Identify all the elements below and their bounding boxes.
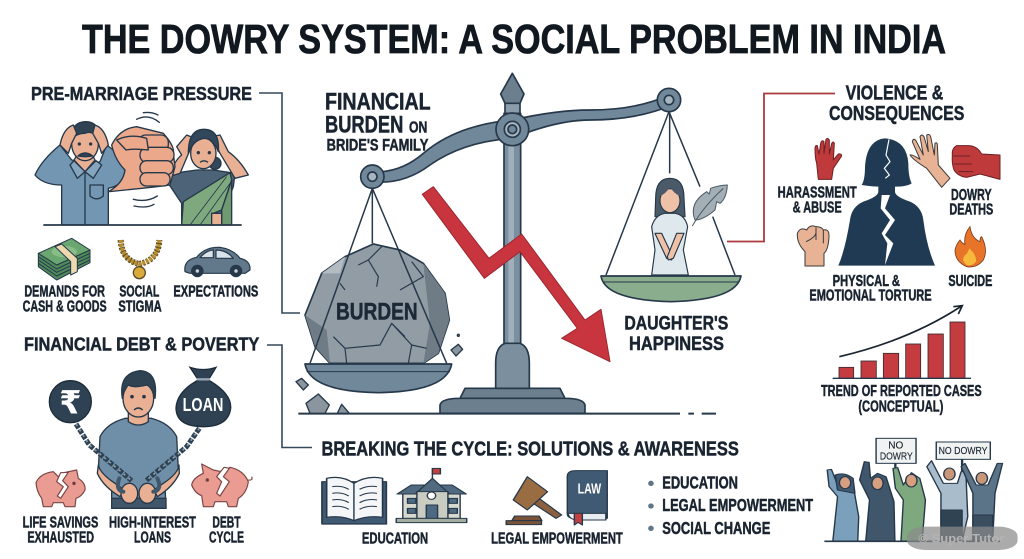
label: physical and emotional torture: EMOTIONAL TORTURE [809,288,932,305]
panel: pre-marriage pressure [23,83,258,316]
icon: broken piggy bank right [192,464,252,507]
bar chart: trend of reported cases [833,306,971,378]
icon: left pan and strings [305,188,452,393]
label: life savings exhausted: EXHAUSTED [27,529,94,546]
icon: daughter [652,178,688,275]
icon: gavel [506,477,562,525]
icon: scale beam [361,88,681,188]
heading: breaking the cycle: BREAKING THE CYCLE: SOLUTIONS & AWARENESS [321,438,739,461]
icon: open book [322,477,386,524]
label: social stigma: STIGMA [118,299,162,316]
bullet list: solutions: LEGAL EMPOWERMENT [662,496,813,515]
label: social stigma: SOCIAL [119,284,160,301]
sign: no dowry: DOWRY [880,450,913,462]
icon: burden boulder [305,244,449,363]
icon: gold necklace [121,240,159,279]
connector: scale to violence panel [727,94,835,242]
label: dowry deaths: DEATHS [949,202,993,219]
icon: protesters with no dowry signs [824,459,1003,541]
label: financial burden on bride's family [325,88,431,154]
heading: pre-marriage pressure: PRE-MARRIAGE PRESSURE [31,83,252,104]
label: expectations: EXPECTATIONS [173,284,258,301]
label: social stigma [118,284,162,316]
red downward arrow [422,187,610,362]
icon: red raised hand [815,138,842,179]
label: education: EDUCATION [362,530,428,547]
label: dowry deaths [949,187,993,219]
label: physical and emotional torture [809,273,932,305]
icon: rupee ball [49,381,91,423]
watermark: super tutor [907,527,1018,550]
icon: broken piggy bank left [36,470,85,507]
sign: no dowry: NO [888,439,903,451]
icon: cracked woman silhouette [838,138,935,266]
icon: loan bag: LOAN [183,394,223,415]
heading: violence and consequences: CONSEQUENCES [829,103,964,125]
icon: stack of cash [38,238,90,280]
label: debt cycle: DEBT [212,514,241,531]
label: daughter's happiness: HAPPINESS [629,334,724,355]
label: harassment and abuse: HARASSMENT [778,184,857,201]
label: debt cycle: CYCLE [209,529,244,546]
label: high-interest loans [109,514,196,546]
sign: no dowry wide: NO DOWRY [939,445,987,456]
panel: breaking the cycle [321,438,1018,550]
heading: financial debt and poverty: FINANCIAL DEBT & POVERTY [24,334,260,355]
label: demands for cash and goods: CASH & GOODS [23,299,107,316]
icon: law book [567,471,607,525]
icon: right pan and strings [601,112,741,302]
label: demands for cash and goods [23,284,107,316]
label: legal empowerment: LEGAL EMPOWERMENT [491,530,623,547]
icon: woman in green sari [168,129,248,225]
heading: violence and consequences [829,82,964,125]
icon: scale stand [440,73,585,413]
label: financial burden on bride's family: BURDEN [325,111,403,138]
label: suicide: SUICIDE [948,273,992,290]
bullet list: solutions [648,474,813,538]
icon: chains [76,424,199,492]
icon: man in chains [97,371,179,508]
motion lines [133,112,159,207]
label: financial burden on bride's family: ON [409,119,427,136]
label: demands for cash and goods: DEMANDS FOR [24,284,105,301]
label: dowry deaths: DOWRY [951,187,992,204]
label: life savings exhausted [23,514,98,546]
icon: giant fist [108,127,175,192]
label: financial burden on bride's family: BRIDE'S FAMILY [327,135,428,154]
label: debt cycle [209,514,244,546]
icon: law book: LAW [578,480,601,497]
icon: car [185,247,250,277]
label: trend of reported cases [821,383,982,415]
label: harassment and abuse [778,184,857,216]
icon: school building [396,468,467,523]
sign: no dowry wide [936,442,990,459]
connector: left panels to scale [259,93,312,448]
label: daughter's happiness: DAUGHTER'S [624,313,728,334]
panel: violence and consequences [778,82,1000,415]
icon: burden boulder: BURDEN [336,298,418,325]
label: financial burden on bride's family: FINANCIAL [325,88,431,115]
icon: skin-tone fist [797,226,829,266]
icon: feather [692,185,727,226]
heading: violence and consequences: VIOLENCE & [846,82,943,104]
label: daughter's happiness [624,313,728,355]
label: physical and emotional torture: PHYSICAL & [833,273,900,290]
label: life savings exhausted: LIFE SAVINGS [23,514,98,531]
icon: rupee ball: ₹ [59,383,81,421]
panel: financial debt and poverty [23,334,260,546]
icon: flame [955,227,985,267]
icon: loan bag [176,367,231,427]
icon: worried man [35,122,131,225]
label: high-interest loans: LOANS [134,529,171,546]
sign: no dowry [876,438,916,463]
panel: central balance scale [296,73,741,414]
label: harassment and abuse: & ABUSE [793,199,842,216]
ground line [298,411,716,417]
rock debris [296,334,463,413]
bullet list: solutions: EDUCATION [662,474,738,492]
icon: red fist [952,146,1000,179]
label: trend of reported cases: (CONCEPTUAL) [858,398,943,415]
icon: open pale hand [910,134,950,187]
label: high-interest loans: HIGH-INTEREST [109,514,196,531]
bullet list: solutions: SOCIAL CHANGE [662,519,770,538]
